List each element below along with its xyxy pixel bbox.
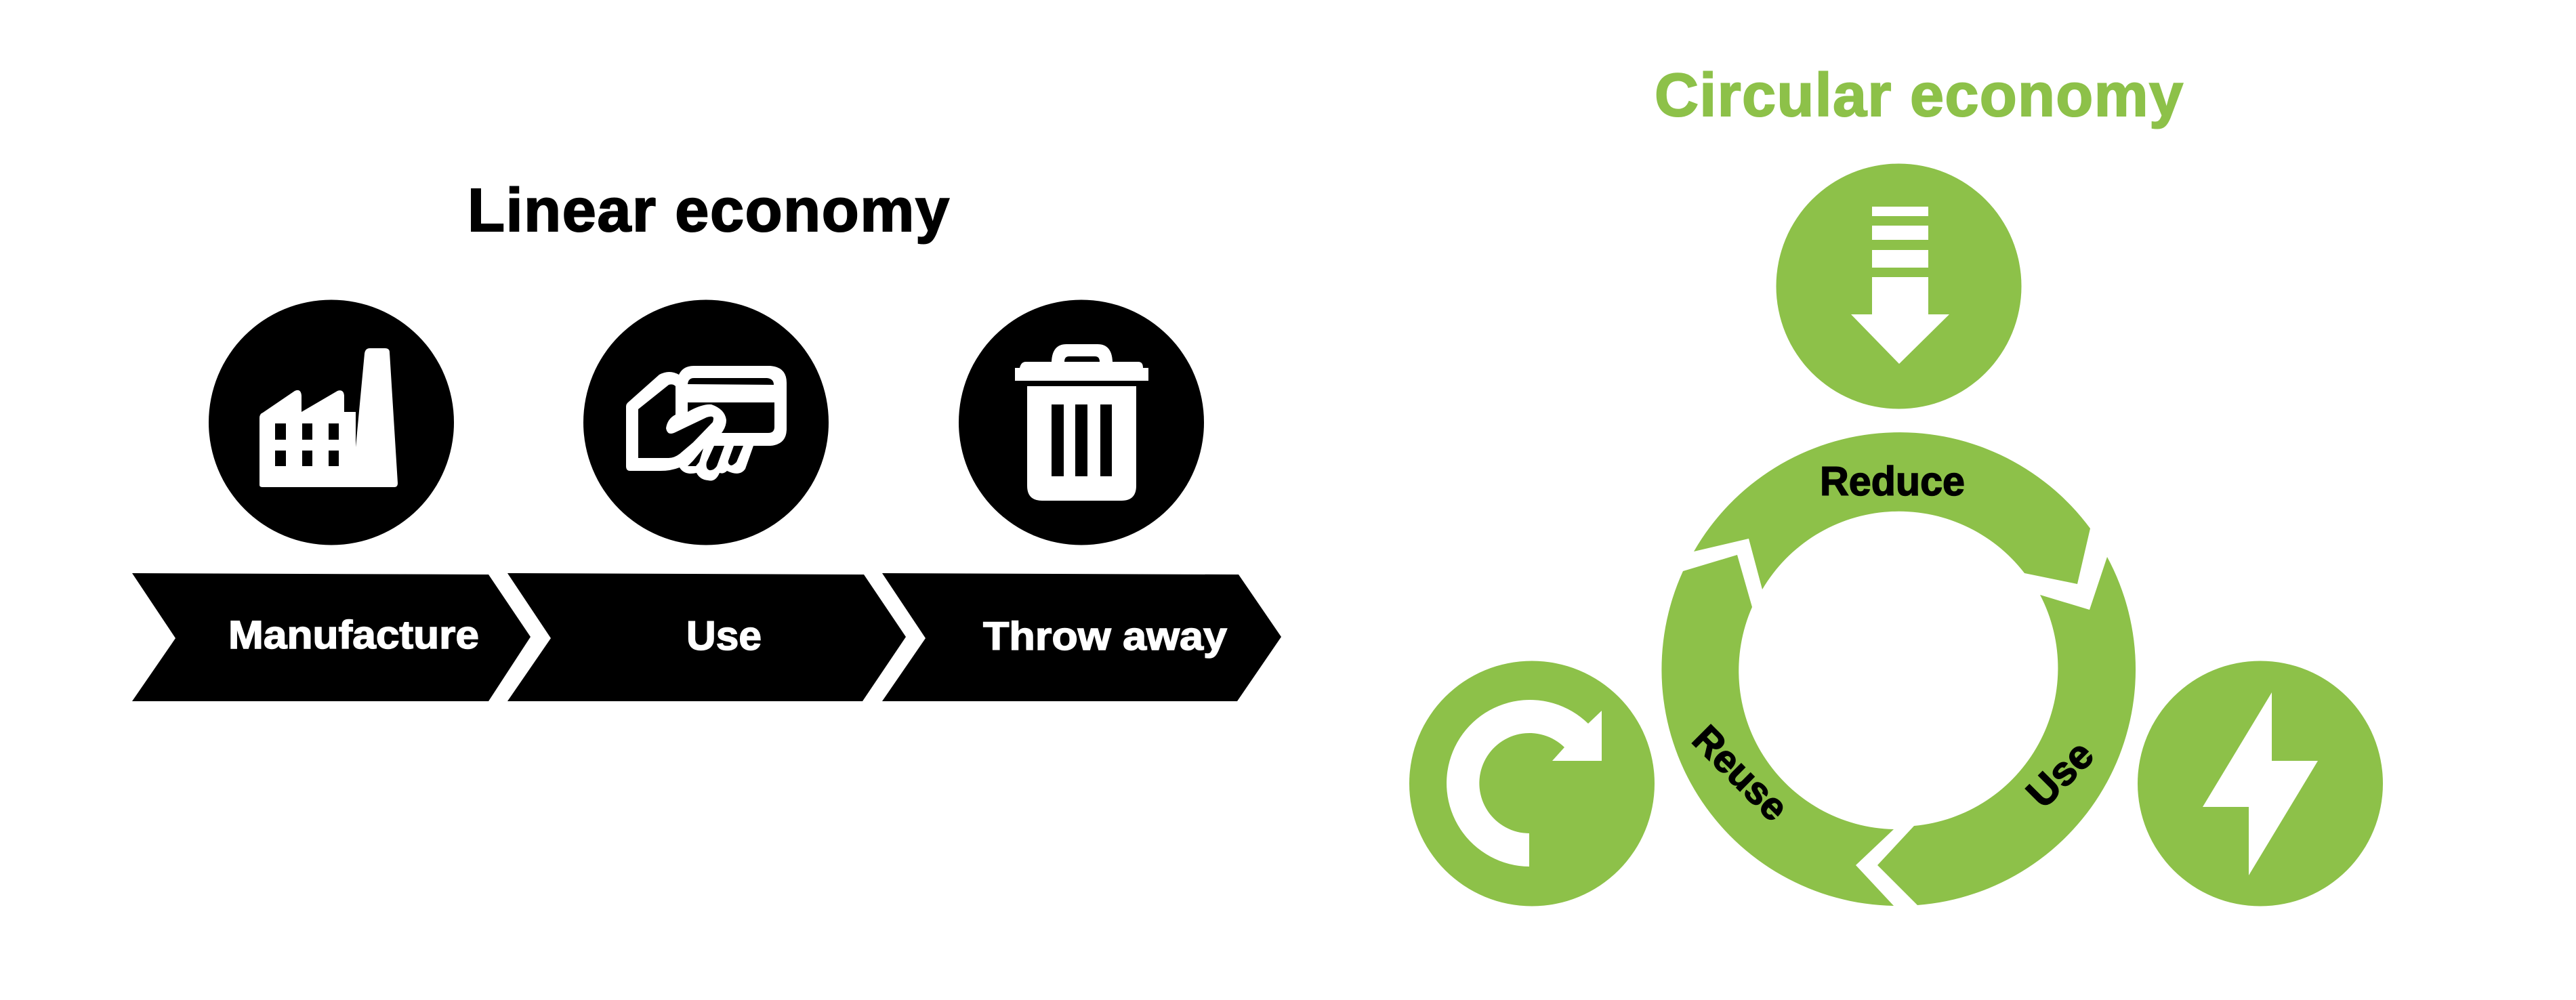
cycle arrow: Reuse bbox=[1661, 555, 1894, 906]
chevron: Manufacture bbox=[132, 573, 531, 701]
heading: Linear economy: Linear economy bbox=[468, 177, 949, 245]
chevron: Use bbox=[507, 573, 906, 701]
chevron: Throw away: Throw away bbox=[983, 614, 1227, 659]
icon: trash can bbox=[959, 299, 1204, 545]
chevron: Throw away bbox=[882, 573, 1281, 701]
icon: lightning bolt bbox=[2138, 661, 2383, 907]
cycle arrow: Use bbox=[1877, 557, 2136, 905]
icon: hand holding card bbox=[583, 299, 829, 545]
heading: Circular economy: Circular economy bbox=[1655, 62, 2183, 129]
icon: reuse arrow bbox=[1409, 661, 1655, 907]
panel: linear economy bbox=[132, 177, 1281, 701]
chevron: Manufacture: Manufacture bbox=[228, 613, 479, 657]
cycle arrow: Use: Use bbox=[2018, 732, 2102, 816]
cycle arrow: Reduce: Reduce bbox=[1820, 459, 1965, 504]
icon: reduce arrow bbox=[1777, 164, 2022, 409]
panel: circular economy bbox=[1409, 62, 2383, 907]
cycle arrow: Reuse: Reuse bbox=[1684, 717, 1797, 830]
cycle arrow: Reduce bbox=[1694, 432, 2090, 589]
chevron: Use: Use bbox=[686, 613, 762, 659]
icon: factory bbox=[209, 299, 454, 545]
